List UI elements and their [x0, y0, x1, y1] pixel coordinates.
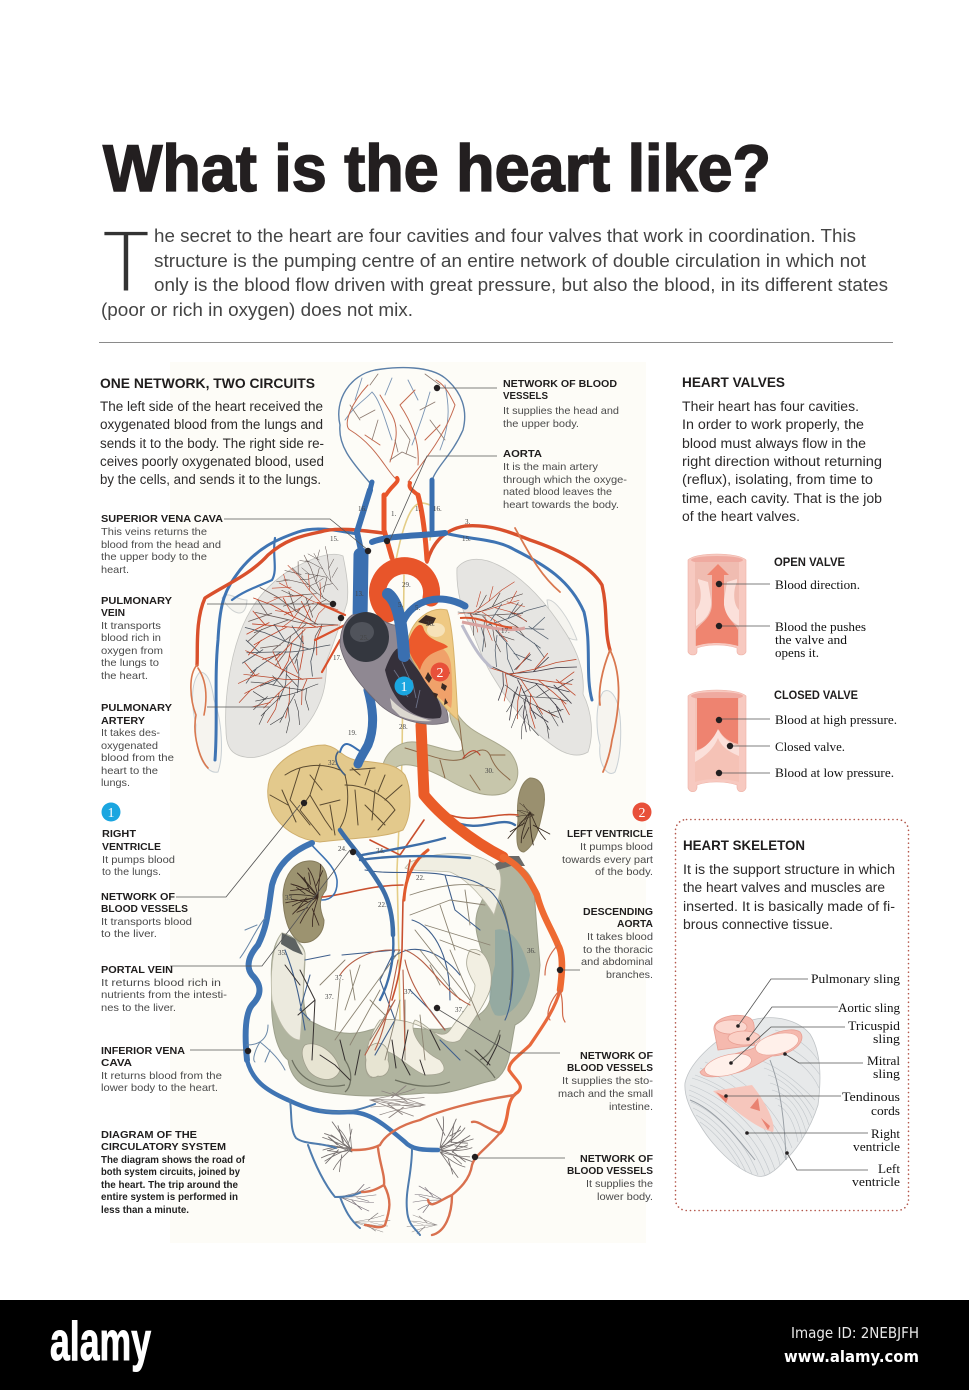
heart skeleton labels: Tendinous: [842, 1090, 900, 1104]
anatomical reference numbers: 1.: [415, 505, 420, 513]
open valve labels: Blood the pushes: [775, 620, 866, 634]
label: network of blood vessels, lower body: BLOOD VESSELS: [567, 1165, 653, 1177]
label: left ventricle: 2: [638, 806, 646, 821]
label: network of blood vessels, head: NETWORK OF BLOOD: [503, 378, 617, 390]
label: network of blood vessels, lower body: [567, 1153, 654, 1203]
mesenteric vessel network: [285, 870, 513, 1080]
text: heart valves: right direction without returning: [682, 454, 882, 469]
inferior vena cava: [240, 843, 438, 1235]
heart skeleton text: [683, 837, 895, 932]
text: one network, two circuits: by the cells, and sends it to the lungs.: [100, 472, 321, 487]
panel: circulatory diagram: [170, 362, 646, 1243]
label: right ventricle: VENTRICLE: [102, 841, 161, 853]
text: one network, two circuits: The left side of the heart received the: [100, 399, 323, 414]
anatomical reference numbers: 34.: [376, 847, 385, 855]
label: portal vein: nes to the liver.: [101, 1002, 176, 1014]
label: pulmonary vein: [101, 595, 172, 682]
heart skeleton text: brous connective tissue.: [683, 917, 833, 932]
anatomical reference numbers: [278, 505, 536, 1014]
label: diagram of the circulatory system: DIAGRAM OF THE: [101, 1129, 197, 1141]
label: network of blood vessels, stomach: BLOOD VESSELS: [567, 1062, 653, 1074]
label: pulmonary vein: blood rich in: [101, 632, 161, 644]
arm and hand vessels: [191, 526, 621, 773]
text: heart valves: time, each cavity. That is the job: [682, 491, 882, 506]
lung left: [226, 540, 354, 758]
gut arteries and portal vein: [322, 813, 518, 1000]
right ventricle: [385, 648, 442, 719]
text: heart valves: of the heart valves.: [682, 509, 800, 524]
anatomical reference numbers: 37.: [335, 974, 344, 982]
text: heart valves: HEART VALVES: [682, 374, 785, 390]
text: heart valves: blood must always flow in the: [682, 436, 866, 451]
label: aorta: through which the oxyge-: [503, 474, 628, 486]
closed valve labels: Blood at low pressure.: [775, 766, 894, 780]
label: right ventricle: RIGHT: [102, 828, 137, 840]
lung right: [450, 559, 594, 755]
aortic arch: [378, 478, 432, 614]
right lung bronchial trees: [450, 577, 594, 752]
heart skeleton labels: Right: [871, 1127, 901, 1141]
text: one network, two circuits: [100, 375, 324, 487]
label: network of blood vessels, lower body: lower body.: [597, 1191, 653, 1203]
anatomical reference numbers: 17.: [501, 627, 510, 635]
anatomical reference numbers: 24.: [338, 845, 347, 853]
label: portal vein: nutrients from the intesti-: [101, 989, 228, 1001]
label: right ventricle: [102, 802, 175, 878]
label: diagram of the circulatory system: The diagram shows the road of: [101, 1154, 245, 1166]
label: pulmonary vein: VEIN: [101, 607, 125, 619]
anatomical reference numbers: 26.: [426, 620, 435, 628]
spleen: [508, 778, 550, 852]
open valve labels: opens it.: [775, 646, 819, 660]
intro text block: (poor or rich in oxygen) does not mix.: [101, 299, 413, 320]
heart skeleton labels: Mitral: [867, 1054, 901, 1068]
label: network of blood vessels, head: VESSELS: [503, 390, 548, 402]
website: www.alamy.com: [784, 1347, 919, 1366]
anatomical reference numbers: 32.: [328, 759, 337, 767]
skeleton leader lines: [724, 979, 868, 1170]
label: descending aorta: branches.: [606, 969, 653, 981]
label: network of blood vessels, stomach: It supplies the sto-: [562, 1075, 654, 1087]
label: descending aorta: It takes blood: [587, 931, 653, 943]
heart: [315, 478, 465, 764]
anatomical reference numbers: 25.: [360, 634, 369, 642]
heart skeleton text: It is the support structure in which: [683, 862, 895, 877]
label: network of blood vessels, liver: BLOOD VESSELS: [101, 903, 188, 915]
label: aorta: AORTA: [503, 448, 542, 460]
label: network of blood vessels, liver: to the liver.: [101, 928, 157, 940]
label: inferior vena cava: CAVA: [101, 1057, 132, 1069]
closed valve markers: [716, 717, 770, 776]
marker 1: 1: [400, 680, 408, 695]
label: left ventricle: LEFT VENTRICLE: [567, 828, 653, 840]
text: one network, two circuits: sends it to the body. The right side re-: [100, 436, 324, 451]
label: network of blood vessels, stomach: intestine.: [609, 1101, 653, 1113]
label: portal vein: It returns blood rich in: [101, 977, 221, 989]
blood arrow: [696, 564, 738, 646]
heart skeleton labels: ventricle: [853, 1140, 900, 1154]
anatomical reference numbers: 36.: [527, 947, 536, 955]
label: diagram of the circulatory system: [101, 1129, 245, 1216]
text: one network, two circuits: ceives poorly oxygenated blood, used: [100, 454, 324, 469]
closed flaps: [695, 729, 739, 762]
anatomical reference numbers: 22.: [378, 901, 387, 909]
anatomical reference numbers: 1.: [391, 510, 396, 518]
label: inferior vena cava: lower body to the heart.: [101, 1082, 218, 1094]
label: inferior vena cava: It returns blood from the: [101, 1070, 222, 1082]
label: inferior vena cava: [101, 1045, 222, 1094]
valve flaps: [696, 579, 739, 626]
kidney: [282, 859, 335, 943]
pink sling rings: [700, 1015, 802, 1081]
label: network of blood vessels, head: It supplies the head and: [503, 405, 619, 417]
label: network of blood vessels, head: [503, 378, 619, 430]
heart skeleton text: the heart valves and muscles are: [683, 880, 885, 895]
liver: [268, 745, 410, 842]
closed valve tube: [688, 690, 746, 792]
heart skeleton labels: Pulmonary sling: [811, 972, 901, 986]
open valve labels: OPEN VALVE: [774, 555, 845, 569]
label: pulmonary vein: oxygen from: [101, 645, 163, 657]
anatomical reference numbers: 19.: [348, 729, 357, 737]
label: aorta: heart towards the body.: [503, 499, 619, 511]
anatomical reference numbers: 15.: [330, 535, 339, 543]
anatomical reference numbers: 13.: [355, 590, 364, 598]
diagram: closed valve: [688, 690, 770, 792]
label: network of blood vessels, lower body: It supplies the: [586, 1178, 653, 1190]
label: right ventricle: It pumps blood: [102, 854, 175, 866]
alamy logo: alamy: [50, 1310, 151, 1372]
heart skeleton text: inserted. It is basically made of fi-: [683, 899, 895, 914]
label: network of blood vessels, lower body: NETWORK OF: [580, 1153, 654, 1165]
label: superior vena cava: SUPERIOR VENA CAVA: [101, 513, 223, 525]
heart skeleton text: HEART SKELETON: [683, 837, 805, 853]
label: diagram of the circulatory system: entire system is performed in: [101, 1191, 238, 1203]
anatomical reference numbers: 22.: [416, 874, 425, 882]
open valve tube: [688, 554, 746, 655]
marker 2: 2: [436, 666, 444, 681]
label: pulmonary artery: ARTERY: [101, 715, 145, 727]
leader lines and dots: [170, 385, 580, 1160]
tendinous cords window: [713, 1085, 774, 1132]
anatomical reference numbers: 28.: [399, 723, 408, 731]
label: pulmonary vein: the heart.: [101, 670, 148, 682]
closed valve labels: [774, 688, 897, 780]
spinal cord: [396, 503, 432, 1020]
label: descending aorta: to the thoracic: [583, 944, 653, 956]
text: heart valves: In order to work properly, the: [682, 417, 864, 432]
label: pulmonary artery: lungs.: [101, 777, 130, 789]
anatomical reference numbers: 30.: [485, 767, 494, 775]
label: pulmonary artery: blood from the: [101, 752, 174, 764]
label: network of blood vessels, stomach: NETWORK OF: [580, 1050, 654, 1062]
anatomical reference numbers: 3.: [465, 518, 470, 526]
label: left ventricle: It pumps blood: [580, 841, 653, 853]
anatomical reference numbers: 5.: [415, 604, 420, 612]
heart skeleton labels: ventricle: [852, 1175, 900, 1189]
label: diagram of the circulatory system: the heart. The trip around the: [101, 1179, 238, 1191]
footer: watermark bar: [0, 1300, 969, 1390]
label: superior vena cava: [101, 513, 223, 576]
anatomical reference numbers: 35.: [278, 949, 287, 957]
heart skeleton labels: Aortic sling: [838, 1001, 901, 1015]
descending aorta: [352, 725, 565, 1235]
anatomical reference numbers: 5.: [398, 601, 404, 609]
label: pulmonary vein: the lungs to: [101, 657, 159, 669]
vena cava and pulmonary vessels: [315, 480, 445, 764]
closed valve labels: CLOSED VALVE: [774, 688, 858, 702]
label: network of blood vessels, head: the upper body.: [503, 418, 579, 430]
text: one network, two circuits: ONE NETWORK, TWO CIRCUITS: [100, 375, 315, 391]
anatomical reference numbers: 16.: [358, 505, 367, 513]
label: descending aorta: AORTA: [617, 918, 653, 930]
label: aorta: It is the main artery: [503, 461, 599, 473]
heart skeleton illustration: [685, 979, 868, 1176]
marker 2: [430, 662, 450, 682]
anatomical reference numbers: 37.: [455, 1006, 464, 1014]
label: right ventricle: to the lungs.: [102, 866, 161, 878]
intro text block: [101, 212, 888, 320]
open valve labels: Blood direction.: [775, 578, 860, 592]
label: pulmonary artery: heart to the: [101, 765, 158, 777]
open valve labels: [774, 555, 866, 660]
label: network of blood vessels, stomach: [558, 1050, 654, 1113]
heart skeleton labels: [811, 972, 901, 1189]
heart skeleton labels: Left: [878, 1162, 901, 1176]
left ventricle: [408, 609, 458, 720]
panel: heart skeleton: [676, 820, 908, 1210]
label: left ventricle: [562, 802, 653, 878]
label: superior vena cava: This veins returns the: [101, 526, 207, 538]
heart skeleton labels: sling: [873, 1032, 901, 1046]
image id: Image ID: 2NEBJFH: [791, 1324, 919, 1342]
label: superior vena cava: heart.: [101, 564, 129, 576]
text: heart valves: [682, 374, 882, 524]
label: pulmonary artery: PULMONARY: [101, 702, 172, 714]
intro text block: structure is the pumping centre of an entire network of double circulation in which not: [154, 250, 866, 271]
closed valve labels: Closed valve.: [775, 740, 845, 754]
intro text block: only is the blood flow driven with great pressure, but also the blood, in its different states: [154, 274, 888, 295]
right atrium: [343, 612, 389, 662]
label: aorta: [503, 448, 628, 511]
label: superior vena cava: the upper body to the: [101, 551, 207, 563]
label: diagram of the circulatory system: CIRCULATORY SYSTEM: [101, 1141, 226, 1153]
label: portal vein: PORTAL VEIN: [101, 964, 173, 976]
label: diagram of the circulatory system: less than a minute.: [101, 1204, 189, 1216]
label: right ventricle: 1: [108, 806, 114, 821]
heart skeleton labels: Tricuspid: [848, 1019, 901, 1033]
text: heart valves: Their heart has four cavities.: [682, 399, 859, 414]
intestines: [271, 854, 540, 1096]
anatomical reference numbers: 15.: [462, 535, 471, 543]
anatomical reference numbers: 33.: [285, 894, 294, 902]
right side of heart: [340, 614, 448, 724]
high pressure blood: [697, 698, 738, 750]
stomach: [382, 712, 518, 795]
label: left ventricle: of the body.: [595, 866, 653, 878]
label: portal vein: [101, 964, 228, 1014]
open valve markers: [716, 581, 770, 629]
label: descending aorta: and abdominal: [581, 956, 653, 968]
anatomical reference numbers: 17.: [333, 654, 342, 662]
text: one network, two circuits: oxygenated blood from the lungs and: [100, 417, 323, 432]
title: What is the heart like?: [103, 131, 771, 205]
heart skeleton labels: cords: [871, 1104, 900, 1118]
anatomical reference numbers: 37.: [325, 993, 334, 1001]
label: left ventricle: towards every part: [562, 854, 653, 866]
anatomical reference numbers: 29.: [402, 581, 411, 589]
label: pulmonary artery: [101, 702, 174, 789]
open valve labels: the valve and: [775, 633, 848, 647]
label: inferior vena cava: INFERIOR VENA: [101, 1045, 185, 1057]
label: descending aorta: DESCENDING: [583, 906, 653, 918]
label: aorta: nated blood leaves the: [503, 486, 612, 498]
label: network of blood vessels, liver: It transports blood: [101, 916, 192, 928]
drop cap: T: [101, 212, 151, 312]
marker 1: [394, 676, 414, 696]
label: pulmonary artery: oxygenated: [101, 740, 158, 752]
liver veins: [270, 752, 402, 835]
heart skeleton labels: sling: [873, 1067, 901, 1081]
label: pulmonary vein: It transports: [101, 620, 161, 632]
anatomical reference numbers: 37.: [404, 988, 413, 996]
intro text block: he secret to the heart are four cavities and four valves that work in coordination. This: [154, 225, 856, 246]
text: heart valves: (reflux), isolating, from time to: [682, 472, 873, 487]
left lung bronchial trees: [227, 540, 354, 743]
pelvic capillary nets: [315, 1086, 479, 1234]
label: network of blood vessels, liver: NETWORK OF: [101, 891, 176, 903]
label: pulmonary vein: PULMONARY: [101, 595, 172, 607]
label: pulmonary artery: It takes des-: [101, 727, 161, 739]
anatomical reference numbers: 16.: [433, 505, 442, 513]
label: network of blood vessels, liver: [101, 891, 192, 940]
label: descending aorta: [581, 906, 653, 981]
label: network of blood vessels, stomach: mach and the small: [558, 1088, 653, 1100]
diagram: open valve: [688, 554, 770, 655]
pulmonary artery: [388, 594, 465, 656]
label: diagram of the circulatory system: both system circuits, joined by: [101, 1166, 240, 1178]
head vessel network: [339, 368, 465, 483]
closed valve labels: Blood at high pressure.: [775, 713, 897, 727]
label: superior vena cava: blood from the head and: [101, 539, 221, 551]
